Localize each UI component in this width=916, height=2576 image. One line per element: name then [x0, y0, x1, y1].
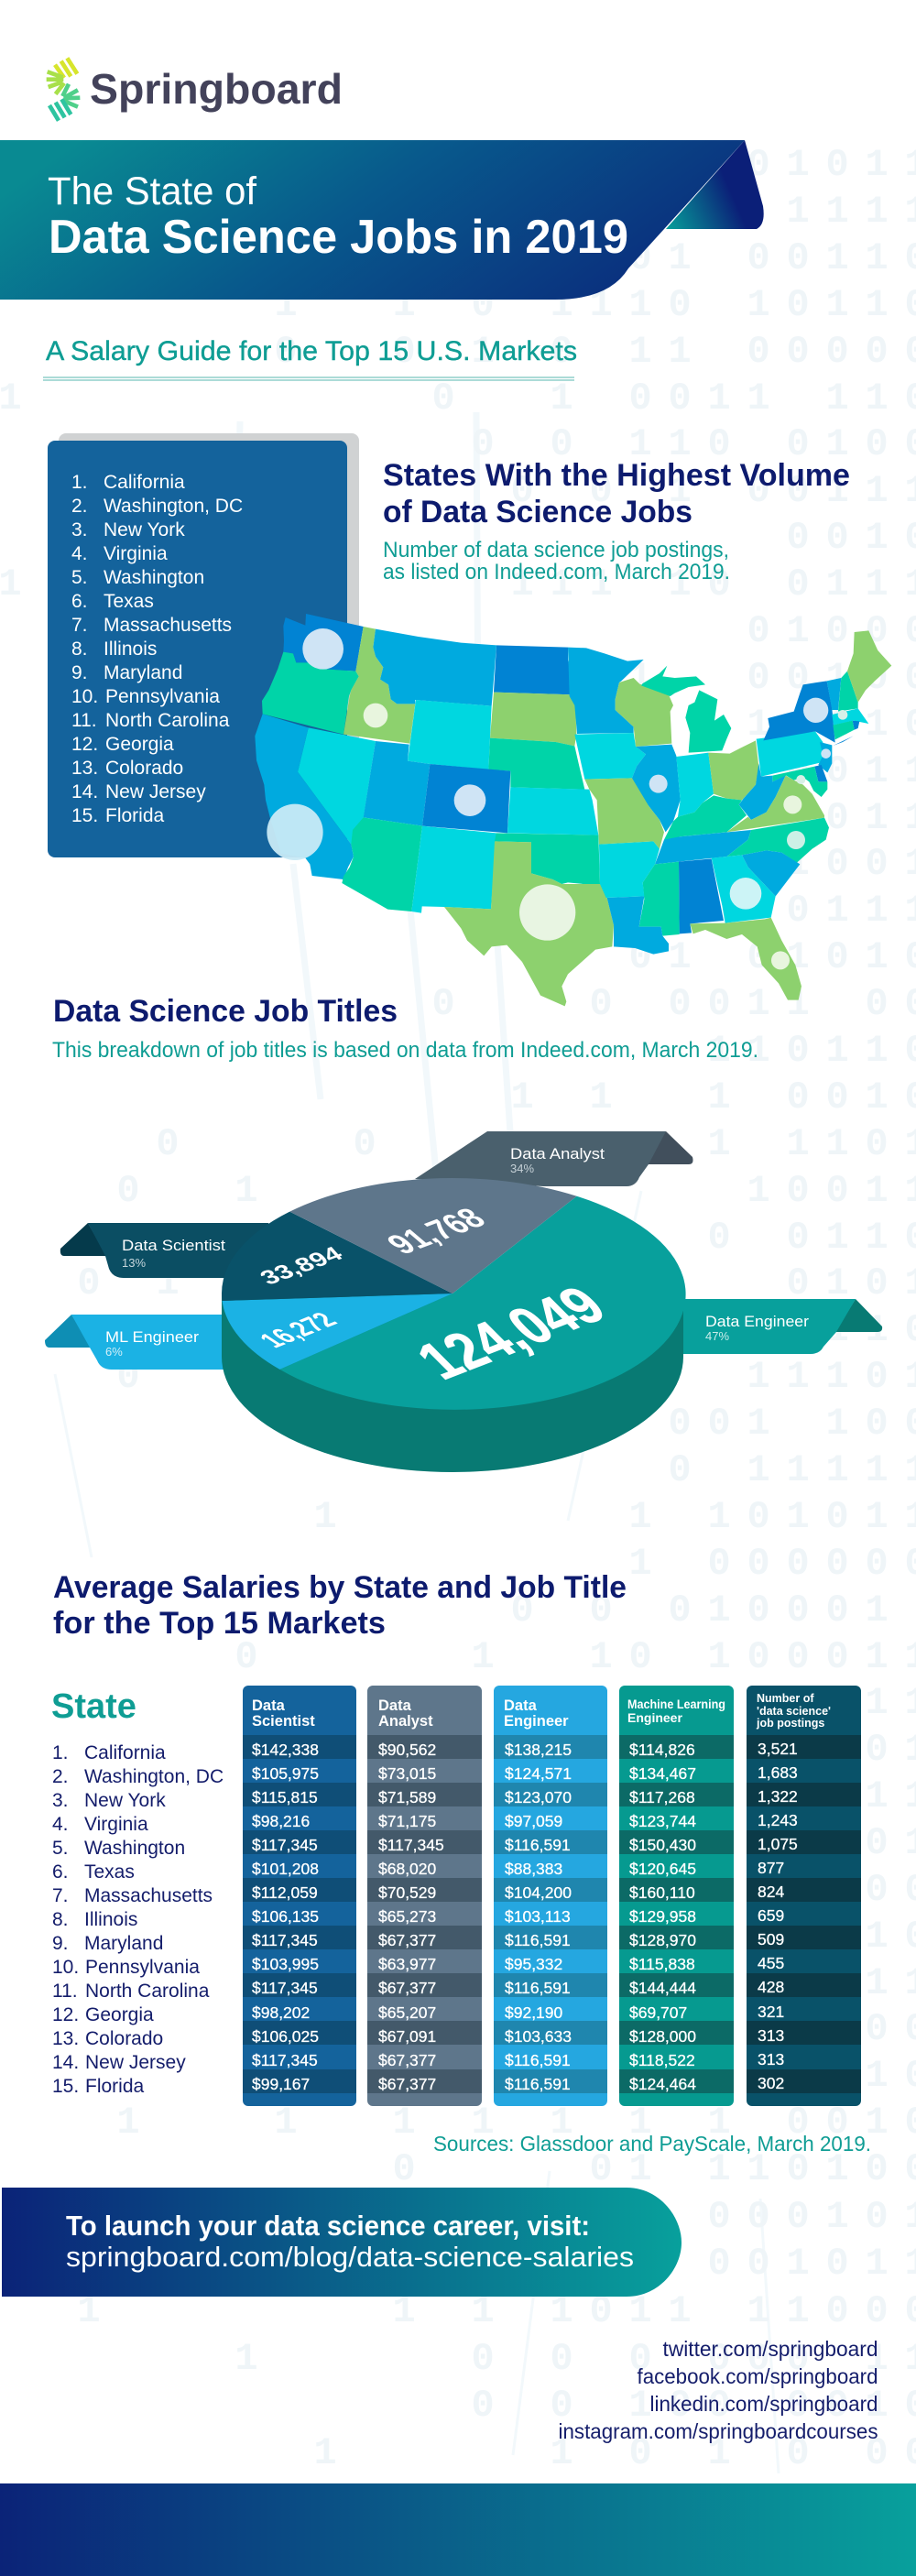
table column: number of job postings: 1,243 [758, 1811, 798, 1829]
table column: Data Analyst: $71,175 [378, 1812, 436, 1830]
table column: Machine Learning Engineer: $117,268 [629, 1788, 695, 1806]
slice: Data Engineer [279, 1196, 686, 1410]
table column: number of job postings: 428 [758, 1978, 784, 1996]
table column: Data Analyst: $73,015 [378, 1764, 436, 1783]
table column: Data Engineer: Data [504, 1697, 538, 1714]
table column: Data Scientist: $103,995 [252, 1955, 319, 1973]
table column: Data Scientist: $142,338 [252, 1741, 319, 1759]
table: state names: 4. [52, 1814, 69, 1835]
slice: ML Engineer [222, 1293, 453, 1370]
heading: states with highest volume: of Data Science Jobs [383, 495, 692, 529]
table column: Data Analyst: $90,562 [378, 1741, 436, 1759]
table column: number of job postings: 1,075 [758, 1835, 798, 1853]
table column: Machine Learning Engineer: $134,467 [629, 1764, 696, 1783]
table: state names: 10. [52, 1957, 79, 1978]
text: map description: Number of data science job postings, [383, 538, 729, 562]
table column: Data Analyst: $70,529 [378, 1883, 436, 1902]
text: social links: facebook.com/springboard [638, 2364, 878, 2388]
table column: Data Engineer: $138,215 [505, 1741, 572, 1759]
state ranking list: 12. [71, 734, 98, 755]
table column: Machine Learning Engineer [619, 1686, 734, 2106]
table: state names: 13. [52, 2028, 79, 2049]
state ranking list: 10. [71, 686, 98, 707]
table column: Machine Learning Engineer: Engineer [627, 1710, 682, 1725]
table column: Data Engineer: $92,190 [505, 2003, 563, 2022]
callout: call to action: To launch your data science career, visit: [66, 2210, 590, 2242]
callout: call to action [2, 2188, 682, 2297]
slice: Data Analyst [289, 1178, 577, 1293]
state ranking list: 1. [71, 472, 88, 493]
table column: Data Engineer: $123,070 [505, 1788, 572, 1806]
table: state names: 3. [52, 1790, 69, 1811]
subtitle: A Salary Guide for the Top 15 U.S. Markets [46, 336, 577, 366]
heading: states with highest volume: States With the Highest Volume [383, 458, 850, 493]
title banner [0, 140, 745, 300]
table: state names: New York [84, 1790, 166, 1811]
table column: Data Scientist: $106,135 [252, 1907, 319, 1926]
table: state names: Illinois [84, 1909, 137, 1930]
table column: Data Analyst: $67,377 [378, 2075, 436, 2093]
table column: number of job postings [747, 1686, 861, 2106]
table: state names: Maryland [84, 1933, 163, 1954]
text: social links: instagram.com/springboardcourses [559, 2419, 878, 2443]
table column: Data Scientist: Scientist [252, 1713, 315, 1730]
pie value: 91,768: 91,768 [378, 1202, 494, 1261]
title text: The State of [48, 169, 257, 213]
table column: Data Scientist: $106,025 [252, 2027, 319, 2046]
table column: Data Engineer: $104,200 [505, 1883, 572, 1902]
state ranking list: Washington, DC [104, 496, 243, 517]
pie side wall [222, 1293, 683, 1472]
table column: Data Analyst: $67,377 [378, 2051, 436, 2069]
table column: Machine Learning Engineer: $128,000 [629, 2027, 696, 2046]
table column: number of job postings: 659 [758, 1906, 784, 1925]
table column: Data Analyst: Data [378, 1697, 412, 1714]
text: job titles description: This breakdown of job titles is based on data from Indeed.com, March 2019. [52, 1038, 758, 1063]
map bubbles [267, 628, 847, 969]
state ranking list: 11. [71, 710, 97, 731]
table: state names: 2. [52, 1766, 69, 1787]
state ranking list: 6. [71, 591, 88, 612]
text: social links: linkedin.com/springboard [650, 2392, 878, 2416]
table heading: State: State [51, 1687, 136, 1726]
table column: Data Analyst: $68,020 [378, 1860, 437, 1878]
table column: Machine Learning Engineer: $120,645 [629, 1860, 696, 1878]
heading: states with highest volume [383, 458, 850, 529]
table column: Data Scientist: $99,167 [252, 2075, 310, 2093]
table column: Data Analyst: $63,977 [378, 1955, 436, 1973]
table: state names: 1. [52, 1742, 69, 1763]
table: state names: 9. [52, 1933, 69, 1954]
pie value: 124,049: 124,049 [403, 1276, 620, 1391]
table column: Machine Learning Engineer: $128,970 [629, 1931, 696, 1949]
state ranking list: Massachusetts [104, 615, 232, 636]
table: state names: 14. [52, 2052, 79, 2073]
state ranking list: 2. [71, 496, 88, 517]
text: map description [383, 538, 730, 584]
table column: Data Analyst: $71,589 [378, 1788, 436, 1806]
state ranking list: 8. [71, 639, 88, 660]
table column: Data Engineer: $116,591 [505, 1931, 571, 1949]
table column: Data Scientist [243, 1686, 356, 2106]
logo: Springboard [47, 58, 343, 121]
table column: Machine Learning Engineer: $144,444 [629, 1979, 696, 1997]
table column: Machine Learning Engineer: $123,744 [629, 1812, 696, 1830]
table column: Data Analyst: $67,091 [378, 2027, 436, 2046]
state ranking list: California [104, 472, 185, 493]
table column: number of job postings: 877 [758, 1859, 784, 1877]
text: sources: Sources: Glassdoor and PayScale, March 2019. [433, 2132, 871, 2156]
ribbon: Data Engineer: 47% [705, 1329, 729, 1343]
table: state names: 15. [52, 2076, 79, 2097]
table: state names: 6. [52, 1861, 69, 1883]
table: state names: 12. [52, 2004, 79, 2025]
subtitle [43, 336, 577, 380]
text: social links: twitter.com/springboard [663, 2337, 878, 2361]
table column: Data Engineer: $116,591 [505, 1979, 571, 1997]
state ranking list: New York [104, 519, 185, 540]
footer band [0, 2483, 916, 2576]
table column: Data Analyst: $67,377 [378, 1979, 436, 1997]
table column: Data Engineer: $97,059 [505, 1812, 562, 1830]
ribbon: Data Analyst [415, 1131, 692, 1186]
table column: Machine Learning Engineer: $129,958 [629, 1907, 696, 1926]
table: state names: Georgia [85, 2004, 154, 2025]
heading: data science job titles: Data Science Job Titles [53, 994, 398, 1029]
ribbon: ML Engineer [45, 1315, 238, 1370]
table column: number of job postings: 313 [758, 2050, 784, 2068]
panel: top 15 states list [48, 433, 359, 857]
ribbon: Data Scientist: Data Scientist [122, 1237, 225, 1254]
table column: number of job postings: 824 [758, 1883, 784, 1901]
table column: Machine Learning Engineer: $150,430 [629, 1836, 696, 1854]
ribbon: Data Engineer [669, 1299, 882, 1354]
table column: Data Scientist: $112,059 [252, 1883, 318, 1902]
table: state names: Virginia [84, 1814, 148, 1835]
icon: logo mark [47, 58, 80, 121]
ribbon: Data Analyst: 34% [510, 1162, 534, 1175]
table column: number of job postings: Number of [757, 1692, 814, 1705]
callout: call to action: springboard.com/blog/data-science-salaries [66, 2241, 634, 2273]
table column: Machine Learning Engineer: $124,464 [629, 2075, 696, 2093]
table column: Data Analyst: $65,207 [378, 2003, 436, 2022]
table column: number of job postings: 321 [758, 2003, 784, 2021]
table column: Data Scientist: $98,202 [252, 2003, 310, 2022]
state ranking list: Maryland [104, 662, 182, 683]
table column: Data Scientist: $105,975 [252, 1764, 319, 1783]
pie value: 33,894: 33,894 [255, 1242, 348, 1289]
slice: Data Scientist [222, 1212, 453, 1301]
table column: Data Analyst: $65,273 [378, 1907, 436, 1926]
table: state names: 7. [52, 1885, 69, 1906]
table: state names: Massachusetts [84, 1885, 213, 1906]
table: state names: California [84, 1742, 166, 1763]
heading: average salaries [53, 1570, 627, 1641]
table column: number of job postings: 302 [758, 2074, 784, 2092]
table column: Machine Learning Engineer: $69,707 [629, 2003, 687, 2022]
table: state names: New Jersey [85, 2052, 186, 2073]
state ranking list: 15. [71, 805, 98, 826]
state ranking list: Virginia [104, 543, 168, 564]
table: state names [52, 1742, 224, 2097]
table: state names: Colorado [85, 2028, 163, 2049]
chart: job titles 3D pie [222, 1178, 686, 1472]
table: state names: Florida [85, 2076, 145, 2097]
table column: Data Scientist: $101,208 [252, 1860, 319, 1878]
table: state names: North Carolina [85, 1981, 210, 2002]
state ranking list: Pennsylvania [105, 686, 220, 707]
table column: number of job postings: 313 [758, 2026, 784, 2045]
table column: Data Engineer: $95,332 [505, 1955, 562, 1973]
heading: average salaries: for the Top 15 Markets [53, 1606, 386, 1641]
eastern states [568, 630, 891, 1000]
state ranking list: 4. [71, 543, 88, 564]
table column: Data Scientist: $98,216 [252, 1812, 310, 1830]
ribbon: Data Scientist: 13% [122, 1256, 146, 1270]
state ranking list: 5. [71, 567, 88, 588]
state ranking list: Georgia [105, 734, 174, 755]
logo wordmark: Springboard [90, 65, 343, 113]
table column: Machine Learning Engineer: $115,838 [629, 1955, 695, 1973]
ribbon: Data Analyst: Data Analyst [510, 1145, 605, 1162]
table column: number of job postings: 1,683 [758, 1763, 798, 1782]
banner fold [666, 140, 764, 229]
table column: number of job postings: 455 [758, 1954, 784, 1972]
table column: Data Analyst: Analyst [378, 1713, 433, 1730]
ribbon: Data Scientist [60, 1223, 293, 1278]
table column: Data Engineer: $116,591 [505, 2051, 571, 2069]
table column: Data Scientist: $117,345 [252, 1931, 318, 1949]
table: state names: Pennsylvania [85, 1957, 200, 1978]
table: state names: Washington, DC [84, 1766, 224, 1787]
pie value: 16,272: 16,272 [253, 1309, 344, 1352]
table column: number of job postings: 'data science' [757, 1705, 831, 1718]
state ranking list: Colorado [105, 758, 183, 779]
state ranking list [71, 472, 243, 826]
state ranking list: North Carolina [105, 710, 230, 731]
text: map description: as listed on Indeed.com, March 2019. [383, 560, 730, 584]
heading: average salaries: Average Salaries by State and Job Title [53, 1570, 627, 1605]
state ranking list: New Jersey [105, 781, 206, 802]
table column: Data Engineer: Engineer [504, 1713, 569, 1730]
table column: Data Engineer: $88,383 [505, 1860, 562, 1878]
western states [255, 614, 614, 1006]
ribbon: ML Engineer: ML Engineer [105, 1328, 199, 1346]
state ranking list: Florida [105, 805, 165, 826]
state ranking list: 9. [71, 662, 88, 683]
table column: Data Scientist: $117,345 [252, 1836, 318, 1854]
state ranking list: Illinois [104, 639, 157, 660]
table column: Data Scientist: Data [252, 1697, 286, 1714]
table: state names: 5. [52, 1838, 69, 1859]
state ranking list: 14. [71, 781, 98, 802]
state ranking list: 7. [71, 615, 88, 636]
table column: Machine Learning Engineer: $118,522 [629, 2051, 695, 2069]
table column: Data Analyst: $117,345 [378, 1836, 444, 1854]
table column: Data Engineer [494, 1686, 607, 2106]
state ranking list: 13. [71, 758, 98, 779]
table column: number of job postings: 509 [758, 1930, 784, 1948]
background: binary digits and circuit lines: 0 0 010001 [0, 1588, 905, 1632]
table column: number of job postings: job postings [756, 1717, 824, 1730]
state ranking list: 3. [71, 519, 88, 540]
state ranking list: Washington [104, 567, 204, 588]
state ranking list: Texas [104, 591, 154, 612]
table column: Machine Learning Engineer: Machine Learning [627, 1697, 725, 1711]
ribbon: ML Engineer: 6% [105, 1345, 123, 1359]
table column: Data Engineer: $124,571 [505, 1764, 572, 1783]
table column: Data Scientist: $117,345 [252, 2051, 318, 2069]
table column: Data Engineer: $116,591 [505, 2075, 571, 2093]
chart: US map of job postings [255, 614, 891, 1006]
table: state names: Texas [84, 1861, 135, 1883]
table: state names: 8. [52, 1909, 69, 1930]
table column: Data Engineer: $103,113 [505, 1907, 571, 1926]
table column: Machine Learning Engineer: $114,826 [629, 1741, 695, 1759]
table column: Machine Learning Engineer: $160,110 [629, 1883, 695, 1902]
table column: Data Engineer: $103,633 [505, 2027, 572, 2046]
table column: Data Scientist: $115,815 [252, 1788, 318, 1806]
table column: Data Analyst: $67,377 [378, 1931, 436, 1949]
table: state names: 11. [52, 1981, 78, 2002]
table column: number of job postings: 3,521 [758, 1740, 798, 1758]
table: state names: Washington [84, 1838, 185, 1859]
title text [48, 169, 628, 264]
table column: Data Analyst [367, 1686, 482, 2106]
table column: number of job postings: 1,322 [758, 1787, 798, 1806]
table column: Data Engineer: $116,591 [505, 1836, 571, 1854]
text: social links [559, 2337, 878, 2443]
title text: Data Science Jobs in 2019 [49, 211, 628, 264]
ribbon: Data Engineer: Data Engineer [705, 1313, 809, 1330]
table column: Data Scientist: $117,345 [252, 1979, 318, 1997]
